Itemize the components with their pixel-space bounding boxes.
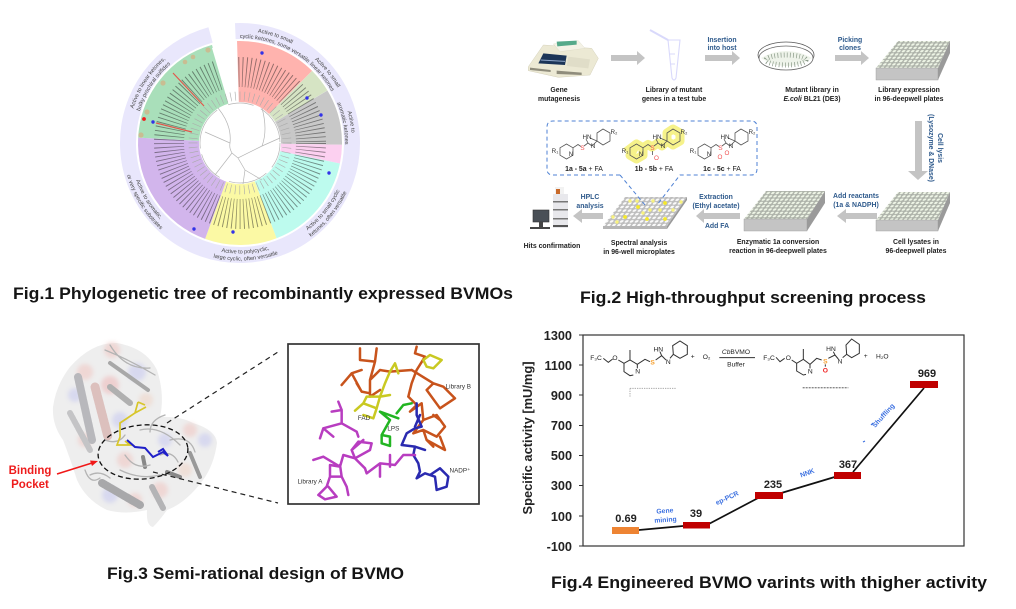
molecule: sulfone: R₁ bbox=[690, 148, 696, 155]
label: picking clones: clones bbox=[839, 45, 861, 52]
text: library expression: in 96-deepwell plates bbox=[875, 96, 944, 103]
caption: figure 3: Fig.3 Semi-rational design of BVMO bbox=[107, 564, 404, 583]
reaction: product: N bbox=[808, 368, 813, 375]
y axis labels: 300 bbox=[551, 479, 572, 493]
panel: phylogenetic tree bbox=[120, 23, 360, 263]
molecule: sulfide: 1a - 5a + FA bbox=[565, 166, 603, 173]
ring labels: ketones, often versatile bbox=[308, 192, 346, 237]
arrow head bbox=[90, 460, 98, 466]
ring labels: Active to linear ketones, bbox=[130, 58, 166, 109]
values: 235 bbox=[764, 479, 782, 491]
panel: activity chart bbox=[520, 329, 964, 554]
plate: enzymatic conversion bbox=[744, 191, 825, 231]
caption: figure 2: Fig.2 High-throughput screening process bbox=[580, 288, 926, 307]
plate: spectral microplate bbox=[603, 197, 687, 229]
bar: wild type bbox=[612, 527, 639, 534]
molecule: sulfide bbox=[552, 129, 618, 173]
ring labels: cyclic ketones, some versatile bbox=[240, 34, 310, 62]
residues: library B bbox=[342, 347, 455, 450]
molecule: sulfone: HN bbox=[720, 134, 730, 141]
zoom guide lines bbox=[153, 352, 278, 503]
arrow: to HPLC bbox=[573, 209, 603, 223]
label: HPLC analysis: HPLC bbox=[581, 194, 599, 201]
y axis ticks bbox=[579, 335, 583, 546]
reaction: substrate: Buffer bbox=[727, 362, 746, 369]
step label: gene mining: Gene bbox=[656, 507, 674, 516]
reaction: substrate: O₂ bbox=[703, 354, 711, 361]
tree centre bbox=[199, 102, 281, 184]
values: 39 bbox=[690, 508, 702, 520]
molecule: sulfide: R₁ bbox=[552, 148, 558, 155]
y axis labels: 1100 bbox=[544, 359, 572, 373]
ring labels: linear ketones bbox=[310, 62, 334, 92]
arrow: to microplate bbox=[696, 209, 740, 223]
label: add FA: Add FA bbox=[705, 223, 729, 230]
molecule: sulfone: O bbox=[725, 150, 730, 157]
ring labels: Active to aromatic, bbox=[136, 180, 161, 220]
ligand: NADP bbox=[127, 440, 168, 457]
label: NADP: NADP⁺ bbox=[450, 468, 470, 475]
cofactor: NADP bbox=[402, 403, 448, 490]
step label: gene mining: mining bbox=[654, 516, 677, 525]
molecule: sulfoxide highlighted: HN bbox=[652, 134, 662, 141]
red marker bbox=[142, 117, 146, 121]
ligand: LPS bbox=[380, 403, 412, 446]
callout: dashed product box bbox=[547, 121, 757, 205]
molecule: sulfoxide highlighted: 1b - 5b + FA bbox=[635, 166, 674, 173]
reaction: substrate: F₃C bbox=[590, 355, 602, 362]
reaction: substrate: + bbox=[691, 353, 695, 360]
text: enzymatic conversion: Enzymatic 1a conversion bbox=[737, 239, 819, 246]
reaction: substrate: N bbox=[635, 369, 640, 376]
label: insertion into host: Insertion bbox=[707, 37, 737, 44]
activity trend line bbox=[639, 388, 924, 530]
label: LPS: LPS bbox=[387, 425, 399, 432]
clade sectors bbox=[140, 43, 340, 243]
reaction: product: HN bbox=[826, 346, 836, 353]
text: mutant library: Mutant library in bbox=[785, 87, 839, 94]
ligand: FAD bbox=[117, 402, 146, 445]
reaction: product: + bbox=[864, 353, 868, 360]
label: cell lysis: (Lysozyme & DNase) bbox=[927, 114, 934, 182]
values bbox=[615, 368, 936, 525]
arrow: down bbox=[908, 121, 928, 180]
ring labels: Active to small bbox=[314, 58, 341, 88]
reaction: substrate: S bbox=[650, 360, 655, 367]
ring labels: aromatic ketones bbox=[337, 102, 348, 144]
y axis labels bbox=[544, 329, 572, 554]
bar: gene mining bbox=[683, 522, 710, 528]
text: library of mutant genes: genes in a test tube bbox=[642, 96, 706, 103]
gene labels bbox=[169, 72, 311, 214]
ring labels: Active to small bbox=[258, 28, 294, 44]
molecule: sulfide: S bbox=[580, 145, 585, 152]
values: 367 bbox=[839, 459, 857, 471]
ring labels: Active to bbox=[348, 112, 355, 132]
molecule: sulfone: S bbox=[718, 145, 723, 152]
bar: ep-PCR bbox=[755, 492, 783, 499]
label: cell lysis bbox=[927, 114, 943, 182]
plate: library expression bbox=[876, 41, 950, 80]
label: add reactants: Add reactants bbox=[833, 193, 879, 200]
panel: screening workflow bbox=[524, 30, 950, 256]
text: gene mutagenesis: Gene bbox=[550, 87, 568, 94]
molecule: sulfoxide highlighted: S bbox=[650, 145, 655, 152]
star markers bbox=[138, 47, 211, 138]
icon: HPLC instrument bbox=[530, 187, 568, 229]
icon: test tube bbox=[650, 30, 680, 80]
y axis labels: 900 bbox=[551, 389, 572, 403]
arrow: insertion bbox=[705, 51, 740, 65]
panel: protein structure bbox=[9, 342, 278, 527]
label: cell lysis: Cell lysis bbox=[936, 133, 943, 163]
label: library A: Library A bbox=[298, 479, 323, 486]
molecule: sulfide: N bbox=[569, 151, 574, 158]
blue markers bbox=[151, 51, 331, 234]
arrow: picking bbox=[835, 51, 869, 65]
highlighted genes bbox=[156, 73, 204, 132]
reaction: product: F₃C bbox=[763, 355, 775, 362]
step label: NNK: NNK bbox=[799, 468, 816, 479]
cofactor: FAD bbox=[355, 355, 442, 418]
molecule: sulfone: R₂ bbox=[748, 129, 756, 136]
reaction: product: O bbox=[823, 368, 828, 375]
arrow: to library bbox=[611, 51, 645, 65]
step label: ep-PCR: ep-PCR bbox=[715, 490, 740, 507]
caption: figure 4: Fig.4 Engineered BVMO varints with thigher activity bbox=[551, 573, 988, 592]
reaction: product: O bbox=[786, 355, 791, 362]
plot frame bbox=[583, 335, 964, 546]
ring labels: or very specific substrates bbox=[127, 174, 162, 230]
tree branches bbox=[193, 96, 287, 190]
reaction: product bbox=[763, 339, 889, 388]
molecule: sulfone: O bbox=[718, 154, 723, 161]
text: mutant library: E.coli BL21 (DE3) bbox=[783, 96, 841, 103]
surface colour patches bbox=[68, 342, 212, 507]
y axis labels: 1300 bbox=[544, 329, 572, 343]
text: library of mutant genes: Library of mutant bbox=[646, 87, 702, 94]
reaction: product: H₂O bbox=[876, 354, 889, 361]
y axis labels: -100 bbox=[547, 540, 572, 554]
molecule: sulfone: N bbox=[729, 143, 734, 150]
molecule: sulfoxide highlighted: N bbox=[661, 143, 666, 150]
label: add reactants: (1a & NADPH) bbox=[833, 202, 879, 209]
sticks bbox=[298, 347, 471, 499]
ribbon helices bbox=[70, 345, 200, 508]
label: binding pocket: Binding bbox=[9, 465, 51, 477]
outer category ring bbox=[123, 26, 357, 260]
molecule: sulfoxide highlighted: O bbox=[654, 155, 659, 162]
values: 0.69 bbox=[615, 513, 637, 525]
molecule: sulfone: N bbox=[707, 151, 712, 158]
molecule: sulfide: HN bbox=[582, 134, 592, 141]
molecule: sulfide: R₂ bbox=[610, 129, 618, 136]
ring labels bbox=[127, 28, 355, 262]
ring labels: bulky prochiral sulfides bbox=[136, 62, 170, 111]
label: extraction: Extraction bbox=[699, 194, 733, 201]
plate: cell lysates bbox=[876, 192, 950, 231]
frame bbox=[288, 344, 479, 504]
molecule: sulfide: N bbox=[591, 143, 596, 150]
panel: active site detail bbox=[288, 344, 479, 504]
ring labels: Active to polycyclic, bbox=[221, 246, 270, 254]
label: binding pocket: Pocket bbox=[11, 479, 49, 491]
ring labels: Active to small cyclic bbox=[306, 190, 340, 230]
label: library B: Library B bbox=[446, 384, 471, 391]
reaction: substrate: O bbox=[612, 355, 618, 362]
gap wedge bbox=[212, 40, 240, 143]
caption: figure 1: Fig.1 Phylogenetic tree of recombinantly expressed BVMOs bbox=[13, 284, 513, 303]
reaction: substrate: N bbox=[666, 359, 671, 366]
y axis title: Specific activity [mU/mg] bbox=[520, 362, 535, 514]
reaction: substrate: CbBVMO bbox=[722, 349, 750, 356]
text: library expression: Library expression bbox=[878, 87, 940, 94]
bar: shuffling bbox=[910, 381, 938, 388]
arrow: to conversion bbox=[837, 209, 877, 223]
label: insertion into host: into host bbox=[707, 45, 737, 52]
values: 969 bbox=[918, 368, 936, 380]
y axis labels: 500 bbox=[551, 449, 572, 463]
y axis labels: 100 bbox=[551, 510, 572, 524]
text: cell lysates: 96-deepwell plates bbox=[886, 248, 947, 255]
protein surface bbox=[53, 343, 217, 527]
molecule: sulfone: 1c - 5c + FA bbox=[703, 166, 741, 173]
molecule: sulfone bbox=[690, 129, 756, 173]
y axis labels: 700 bbox=[551, 419, 572, 433]
bar: NNK bbox=[834, 472, 861, 479]
text: gene mutagenesis: mutagenesis bbox=[538, 96, 580, 103]
arrow: binding pocket bbox=[57, 463, 92, 474]
reaction: substrate bbox=[590, 341, 755, 397]
reaction: product: N bbox=[838, 358, 843, 365]
label: FAD: FAD bbox=[358, 415, 371, 422]
label: HPLC analysis: analysis bbox=[576, 203, 604, 210]
molecule: sulfoxide highlighted: R₁ bbox=[622, 148, 628, 155]
molecule: sulfoxide highlighted: R₂ bbox=[680, 129, 688, 136]
text: enzymatic conversion: reaction in 96-deepwell plates bbox=[729, 248, 827, 255]
binding pocket outline bbox=[96, 421, 190, 483]
ring labels: large cyclic, often versatile bbox=[214, 251, 278, 262]
molecule: sulfoxide highlighted: N bbox=[639, 151, 644, 158]
step label: shuffling: Shuffling bbox=[871, 403, 896, 429]
label: picking clones: Picking bbox=[838, 37, 862, 44]
molecule: sulfoxide highlighted bbox=[622, 129, 688, 173]
reaction: product: S bbox=[823, 358, 828, 365]
residues: library A bbox=[313, 402, 415, 499]
stray marks bbox=[863, 423, 873, 442]
text: hits confirmation: Hits confirmation bbox=[524, 243, 580, 250]
text: spectral analysis: Spectral analysis bbox=[611, 240, 667, 247]
reaction: substrate: HN bbox=[654, 346, 663, 353]
text: spectral analysis: in 96-well microplates bbox=[603, 249, 675, 256]
text: cell lysates: Cell lysates in bbox=[893, 239, 939, 246]
icon: petri dish bbox=[758, 42, 814, 70]
icon: PCR machine bbox=[528, 41, 598, 77]
label: extraction: (Ethyl acetate) bbox=[692, 203, 740, 210]
